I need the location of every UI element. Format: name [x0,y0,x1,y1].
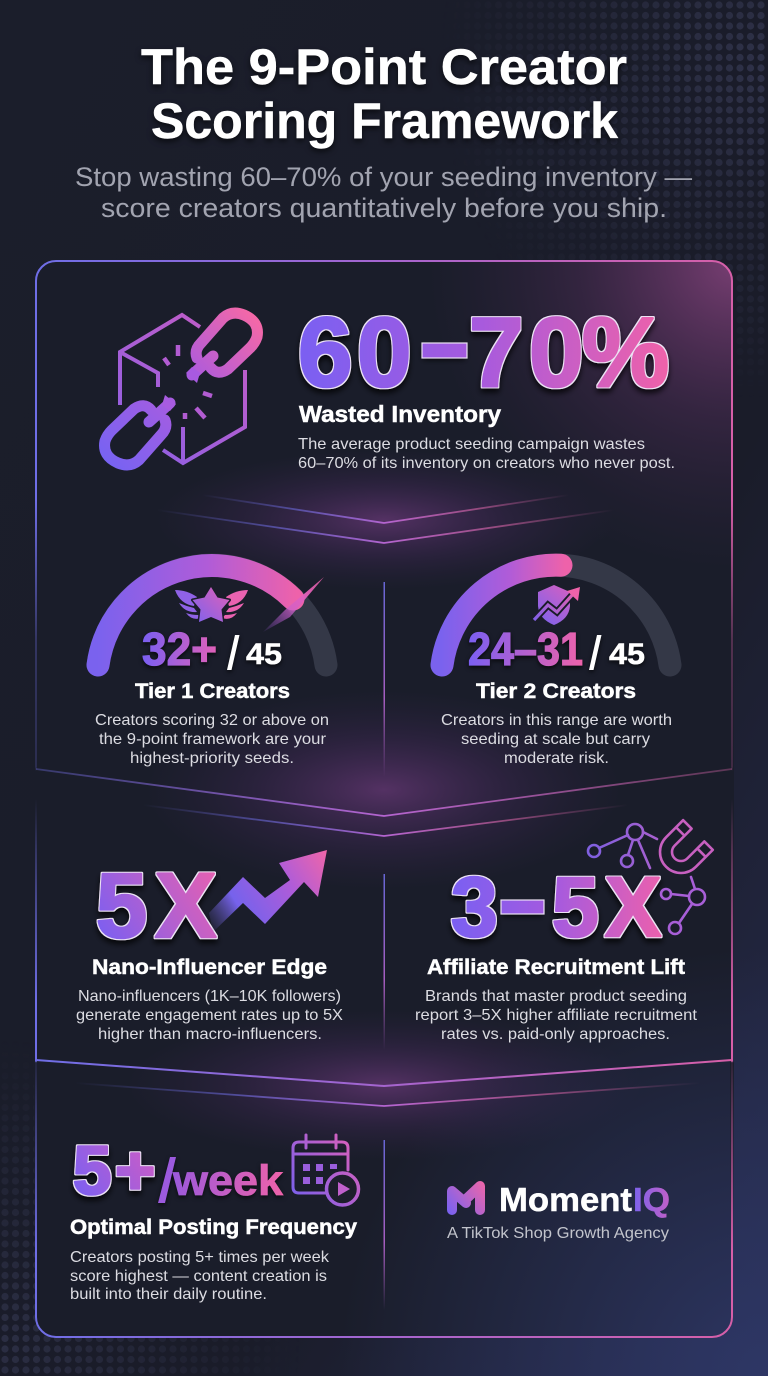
title: Scoring Framework [151,93,618,149]
divider: multipliers [384,874,385,1050]
stat: 5X: 5X [96,855,216,957]
icon: winged star [175,587,248,622]
stat: 3–5X: 5X [552,860,661,954]
text: nano-influencer description: generate engagement rates up to 5X [76,1007,343,1024]
divider: footer [384,1140,385,1310]
text: posting frequency description [70,1249,330,1303]
text: affiliate description: report 3–5X higher affiliate recruitment [415,1007,698,1024]
score: 24–31 / 45: 24–31 [468,623,583,675]
text: affiliate description: rates vs. paid-only approaches. [441,1026,670,1043]
panel: framework card [34,261,734,1337]
chevron divider 2 [36,769,732,836]
subtitle [75,162,692,223]
stat: 3–5X: – [502,862,542,942]
text: wasted inventory description [298,436,675,472]
logo: MomentIQ [452,1181,670,1218]
text: tier 2 description [441,712,672,767]
icon: growth arrow [209,850,327,932]
logo: MomentIQ: IQ [633,1181,670,1218]
score: 32+ / 45: 45 [246,638,282,671]
gauge: tier 1 [98,565,326,665]
text: wasted inventory description: The average product seeding campaign wastes [298,436,645,453]
logo: MomentIQ: Moment [499,1181,632,1218]
stat: 60–70%: 70% [469,297,669,407]
text: tier 1 description: the 9-point framework are your [99,731,327,748]
gauge: tier 2 [442,565,670,665]
chevron divider 1 [157,495,614,543]
heading: tier 2 creators: Tier 2 Creators [476,680,636,703]
text: affiliate description: Brands that master product seeding [425,988,687,1005]
heading: nano-influencer edge: Nano-Influencer Edge [92,956,327,979]
text: posting frequency description: built into their daily routine. [70,1286,267,1303]
chevron divider 3 [36,1060,732,1106]
score: 24–31 / 45: 45 [609,638,645,671]
text: nano-influencer description: higher than macro-influencers. [98,1026,322,1043]
heading: affiliate recruitment lift: Affiliate Recruitment Lift [427,956,685,979]
text: tier 1 description: highest-priority seeds. [130,750,294,767]
stat: /week: week [172,1157,283,1205]
stat: 60–70%: 60 [298,297,412,407]
stat: 60–70%: – [423,302,465,387]
stat dash: 3–5X [501,900,544,914]
score: 32+ / 45 [142,623,282,675]
text: tier 2 description: seeding at scale but carry [461,731,650,748]
subtitle: score creators quantitatively before you ship. [101,193,667,223]
divider: tiers [384,582,385,777]
title: The 9-Point Creator [141,39,627,95]
icon: shield with trend arrow [534,585,580,625]
subtitle: Stop wasting 60–70% of your seeding inventory — [75,162,692,192]
text: posting frequency description: Creators posting 5+ times per week [70,1249,330,1266]
heading: tier 1 creators: Tier 1 Creators [135,680,290,703]
text: wasted inventory description: 60–70% of its inventory on creators who never post. [298,455,675,472]
text: tier 1 description: Creators scoring 32 or above on [95,712,329,729]
stat dash: 60–70% [422,343,467,358]
text: nano-influencer description: Nano-influencers (1K–10K followers) [78,988,341,1005]
text: posting frequency description: score highest — content creation is [70,1268,327,1285]
text: nano-influencer description [76,988,343,1043]
text: tier 1 description [95,712,329,767]
icon: calendar with play [293,1135,358,1205]
text: tier 2 description: moderate risk. [504,750,609,767]
text: tagline: A TikTok Shop Growth Agency [447,1225,669,1242]
score: 32+ / 45: 32+ [142,623,217,675]
needle: tier 1 [263,577,324,632]
text: tier 2 description: Creators in this range are worth [441,712,672,729]
text: affiliate description [415,988,698,1043]
heading: wasted inventory: Wasted Inventory [299,401,501,427]
title [141,39,627,149]
icon: broken chain in box [105,313,257,465]
stat: 3–5X: 3 [451,860,498,954]
stat: 5+: 5+ [73,1132,155,1209]
heading: optimal posting frequency: Optimal Posting Frequency [70,1216,357,1239]
icon: network and magnet [588,820,713,934]
